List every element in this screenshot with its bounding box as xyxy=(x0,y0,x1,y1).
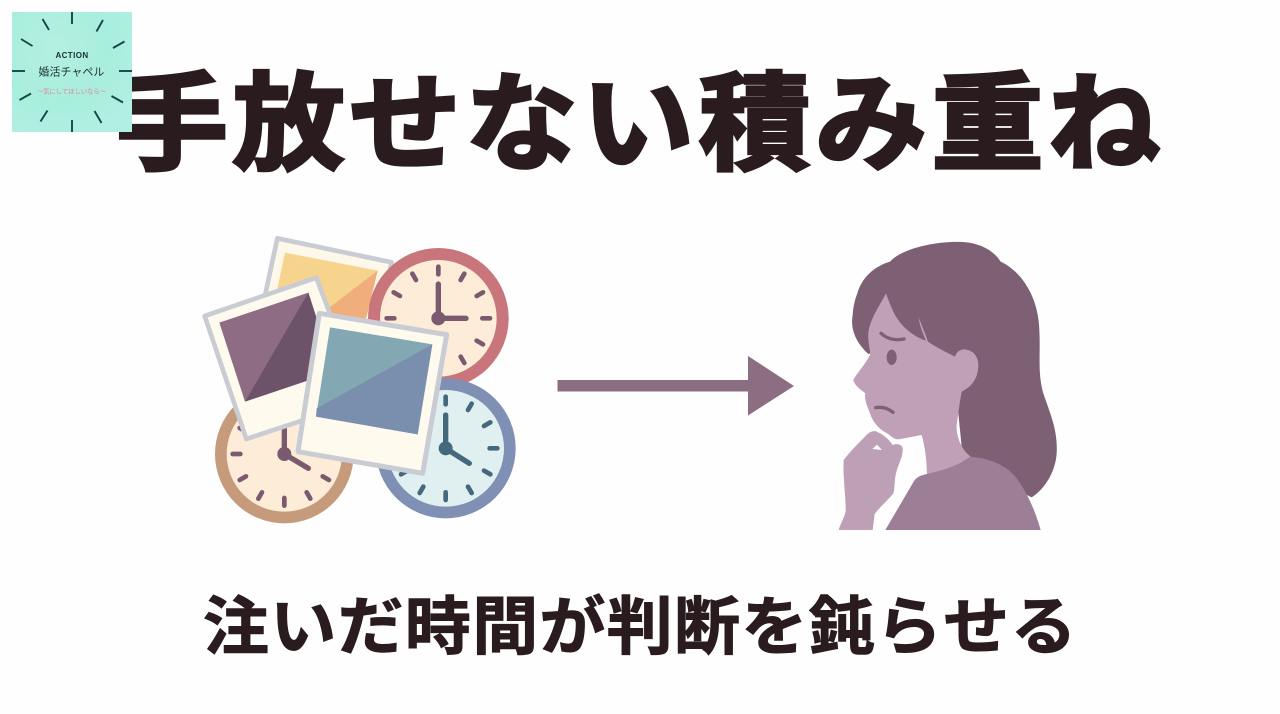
badge label: 婚活チャペル: 婚活チャペル xyxy=(39,64,104,78)
badge label: ACTION: ACTION xyxy=(55,51,89,60)
clock: red xyxy=(368,248,509,389)
photo: yellow xyxy=(253,238,392,377)
photo: purple xyxy=(205,278,363,439)
photo: teal xyxy=(298,313,447,473)
eye xyxy=(887,350,897,365)
mouth xyxy=(876,407,893,412)
illustration: photos and clocks xyxy=(205,238,516,523)
hand xyxy=(839,431,903,530)
illustration: worried woman in profile xyxy=(839,242,1057,530)
face and neck xyxy=(853,293,978,474)
title: 手放せない積み重ね xyxy=(116,66,1160,184)
hair xyxy=(852,242,1057,497)
eyebrow xyxy=(881,333,904,340)
badge: ACTION 婚活チャペル xyxy=(12,12,132,132)
hand gap xyxy=(872,445,882,450)
arrow xyxy=(558,356,794,416)
badge label: 気にしてほしいなら: ～気にしてほしいなら～ xyxy=(37,86,107,96)
clock: blue xyxy=(376,378,516,518)
shirt xyxy=(885,457,1041,530)
clock: brown xyxy=(215,385,354,523)
subtitle: 注いだ時間が判断を鈍らせる xyxy=(203,591,1077,663)
